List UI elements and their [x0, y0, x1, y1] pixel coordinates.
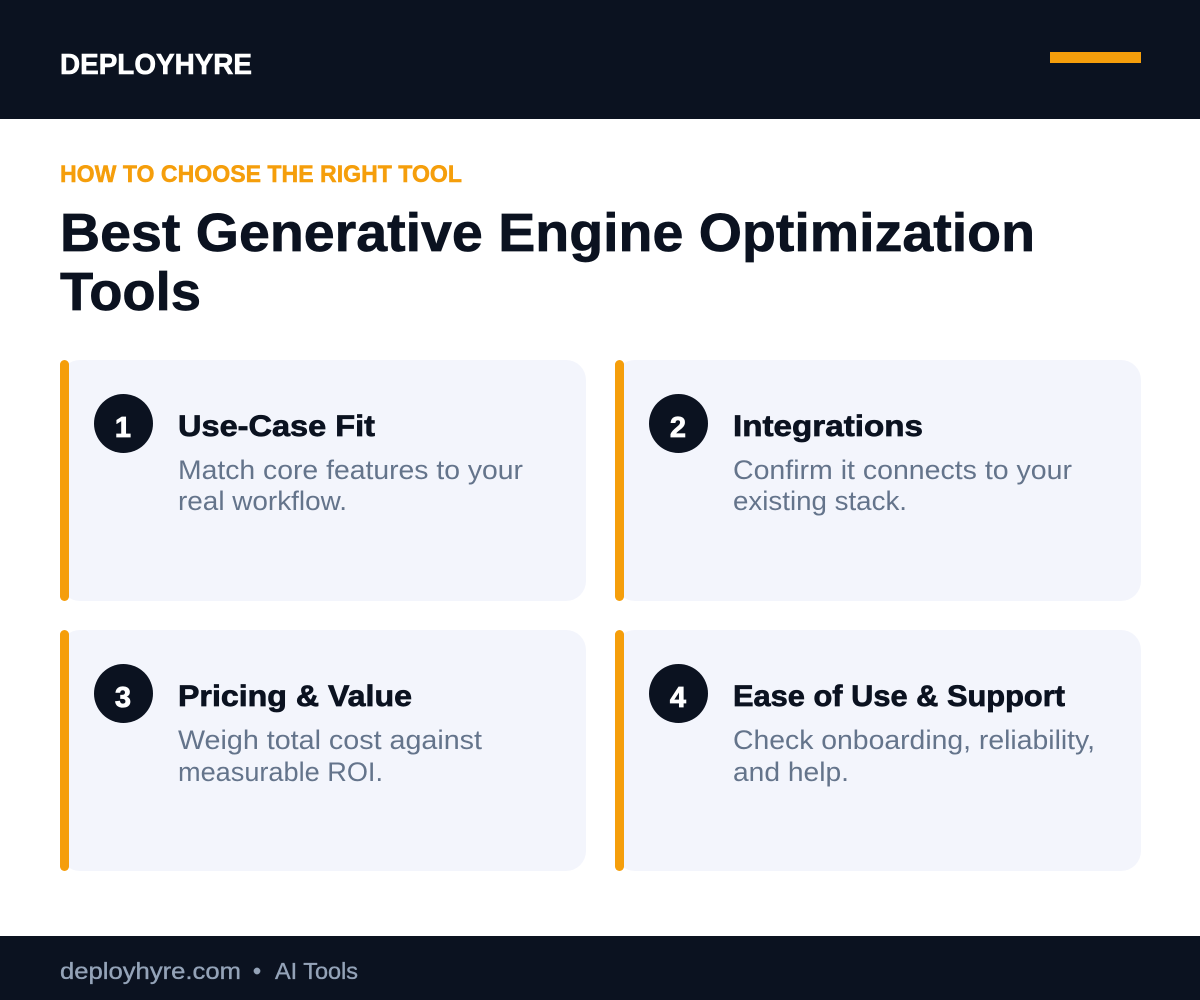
- footer text: [60, 958, 358, 984]
- card text 2: Confirm it connects to your: [733, 455, 1072, 485]
- panel: use-case fit: [60, 360, 586, 601]
- number badge 1: 1: [115, 412, 131, 444]
- main title: Tools: [60, 262, 201, 322]
- number badge 3: 3: [115, 682, 131, 714]
- footer band: [0, 936, 1200, 1000]
- card text 1: real workflow.: [178, 486, 347, 516]
- main title: [60, 203, 1035, 322]
- card text 2: existing stack.: [733, 486, 907, 516]
- card text 3: Weigh total cost against: [178, 725, 483, 755]
- card text 3: measurable ROI.: [178, 757, 383, 787]
- number badge 1: [94, 394, 153, 453]
- number badge 4: 4: [670, 682, 686, 714]
- card heading 2: Integrations: [733, 410, 923, 443]
- brand name: DEPLOYHYRE: [60, 49, 252, 81]
- footer text: AI Tools: [275, 958, 358, 984]
- card heading 4: Ease of Use & Support: [733, 680, 1065, 713]
- panel: pricing and value: [60, 630, 586, 871]
- number badge 3: [94, 664, 153, 723]
- panel: ease of use and support: [615, 630, 1141, 871]
- card text 1: [178, 455, 523, 516]
- footer text: deployhyre.com: [60, 958, 241, 984]
- panel: integrations: [615, 360, 1141, 601]
- card text 4: [733, 725, 1095, 787]
- header band: [0, 0, 1200, 119]
- accent bar 4: [615, 630, 624, 871]
- card text 1: Match core features to your: [178, 455, 523, 485]
- accent bar 2: [615, 360, 624, 601]
- card text 3: [178, 725, 483, 787]
- number badge 2: 2: [670, 412, 686, 444]
- main title: Best Generative Engine Optimization: [60, 203, 1035, 263]
- number badge 2: [649, 394, 708, 453]
- accent bar 3: [60, 630, 69, 871]
- card text 4: and help.: [733, 757, 849, 787]
- card text 4: Check onboarding, reliability,: [733, 725, 1095, 755]
- card heading 1: Use-Case Fit: [178, 410, 375, 443]
- accent bar 1: [60, 360, 69, 601]
- card text 2: [733, 455, 1072, 516]
- number badge 4: [649, 664, 708, 723]
- eyebrow heading: HOW TO CHOOSE THE RIGHT TOOL: [60, 161, 462, 188]
- header accent bar: [1050, 52, 1141, 63]
- card heading 3: Pricing & Value: [178, 680, 412, 713]
